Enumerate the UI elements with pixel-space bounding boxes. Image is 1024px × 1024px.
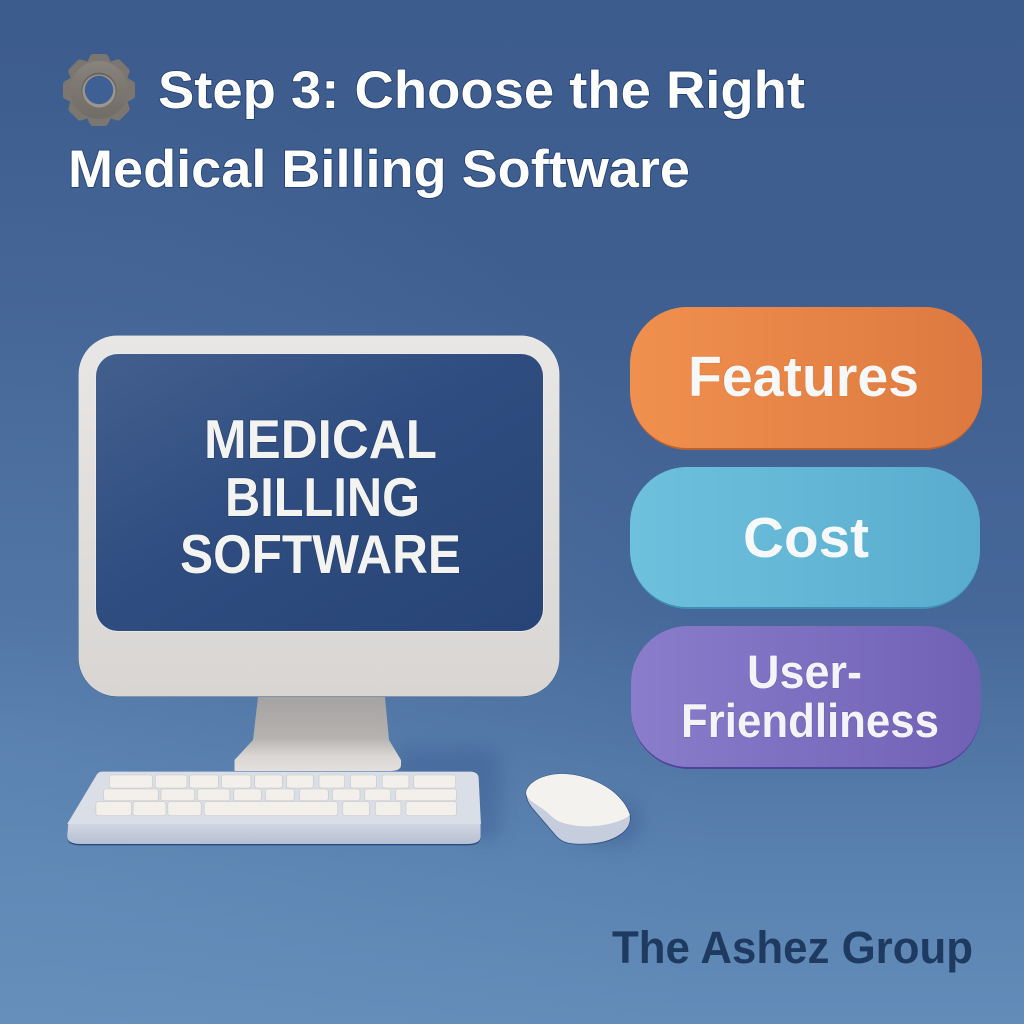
button: User-Friendliness: Friendliness [681, 694, 939, 747]
title: Step 3: Choose the Right [158, 61, 805, 120]
title: Medical Billing Software [68, 140, 690, 199]
mouse [526, 774, 630, 844]
computer monitor [78, 335, 560, 771]
brand name: The Ashez Group [612, 922, 973, 973]
monitor screen: SOFTWARE [180, 523, 461, 585]
button: Cost [630, 467, 980, 609]
button: Features [630, 307, 982, 450]
button: Cost: Cost [743, 506, 869, 570]
monitor screen: BILLING [225, 466, 420, 528]
keyboard [67, 772, 481, 845]
icon: gear [63, 54, 135, 126]
title [68, 61, 805, 199]
button: User-Friendliness [631, 626, 981, 769]
shadow under stand, keyboard and mouse [395, 748, 640, 844]
button: User-Friendliness: User- [747, 645, 862, 698]
button: Features: Features [688, 345, 919, 409]
monitor screen [96, 354, 543, 631]
monitor screen: MEDICAL [204, 408, 437, 470]
